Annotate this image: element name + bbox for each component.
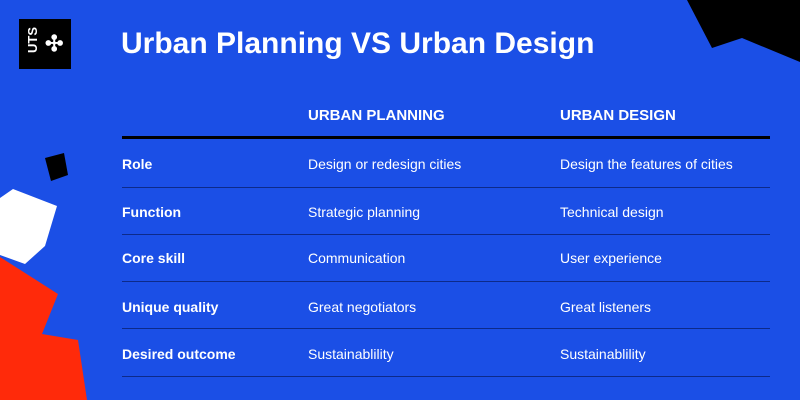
table rows: Desired outcome: [122, 346, 236, 362]
shape: top right black: [687, 0, 800, 62]
table rows: Function: [122, 204, 181, 220]
table rows: Core skill: [122, 250, 185, 266]
table rows: Communication: [308, 250, 405, 266]
table rows: Sustainablility: [308, 346, 394, 362]
shape: black cube: [45, 153, 68, 181]
table rows: Design or redesign cities: [308, 156, 461, 172]
shape: red: [0, 257, 87, 400]
text: URBAN DESIGN: [560, 107, 676, 124]
table rows: Role: [122, 156, 152, 172]
table rows: Sustainablility: [560, 346, 646, 362]
title: Urban Planning VS Urban Design: [121, 27, 594, 60]
logo: [19, 19, 71, 69]
table rows: User experience: [560, 250, 662, 266]
table rows: Technical design: [560, 204, 664, 220]
shape: white cube: [0, 189, 57, 264]
table rows: [122, 156, 733, 362]
column headers: URBAN PLANNING: [308, 107, 445, 124]
table rows: Great listeners: [560, 299, 651, 315]
table rows: Strategic planning: [308, 204, 420, 220]
table rows: Great negotiators: [308, 299, 416, 315]
logo: ✣: [45, 31, 63, 56]
table rows: Unique quality: [122, 299, 218, 315]
table rows: Design the features of cities: [560, 156, 733, 172]
logo: UTS: [25, 27, 40, 53]
